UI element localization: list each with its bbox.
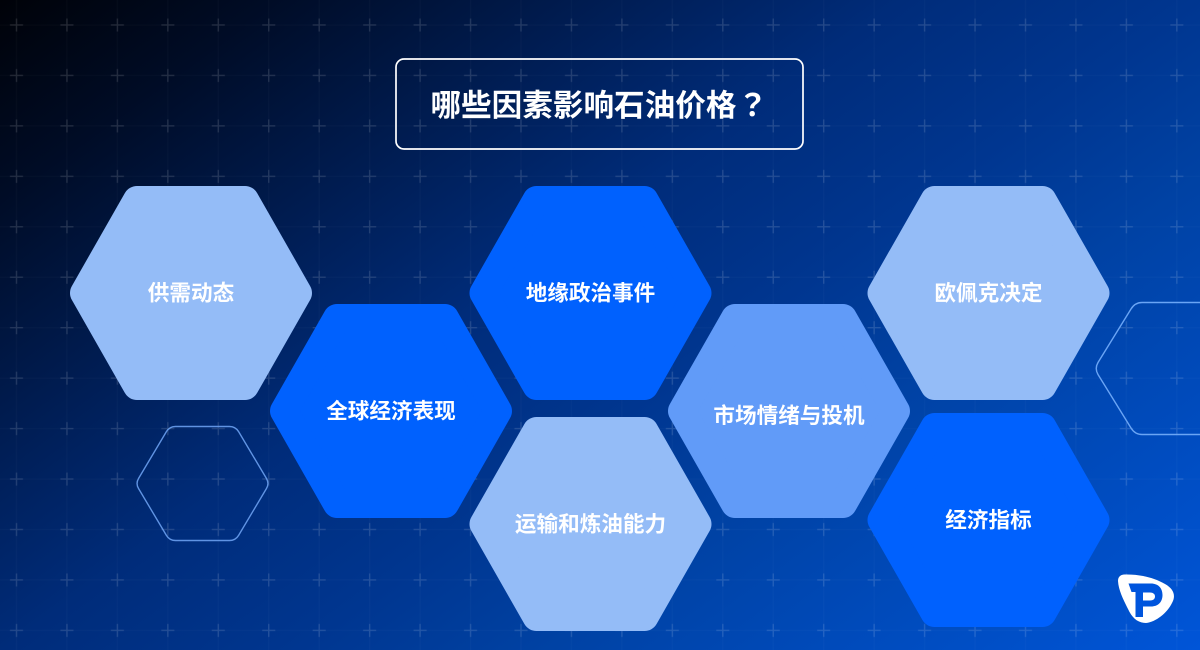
hexagon: market sentiment: [682, 318, 896, 504]
title: 哪些因素影响石油价格: [430, 89, 737, 123]
label: 经济指标: [945, 508, 1032, 532]
title box: [396, 59, 803, 149]
title: ？: [737, 81, 768, 125]
label: 供需动态: [148, 280, 235, 306]
hexagon: economic indicators: [882, 427, 1096, 613]
hexagon: global economy: [284, 318, 498, 504]
label: 地缘政治事件: [526, 280, 655, 306]
hexagon: transport and refining: [484, 431, 698, 617]
icon: logo: [1118, 574, 1174, 623]
outline hexagon: lower left: [137, 426, 268, 540]
label: 市场情绪与投机: [713, 403, 865, 428]
hexagon: supply and demand: [84, 200, 298, 386]
label: 全球经济表现: [326, 398, 456, 424]
hexagon: OPEC decisions: [882, 200, 1096, 386]
outline hexagon: right edge: [1096, 302, 1200, 434]
hexagon: geopolitical events: [484, 200, 698, 386]
label: 欧佩克决定: [935, 280, 1042, 306]
label: 运输和炼油能力: [515, 512, 666, 536]
